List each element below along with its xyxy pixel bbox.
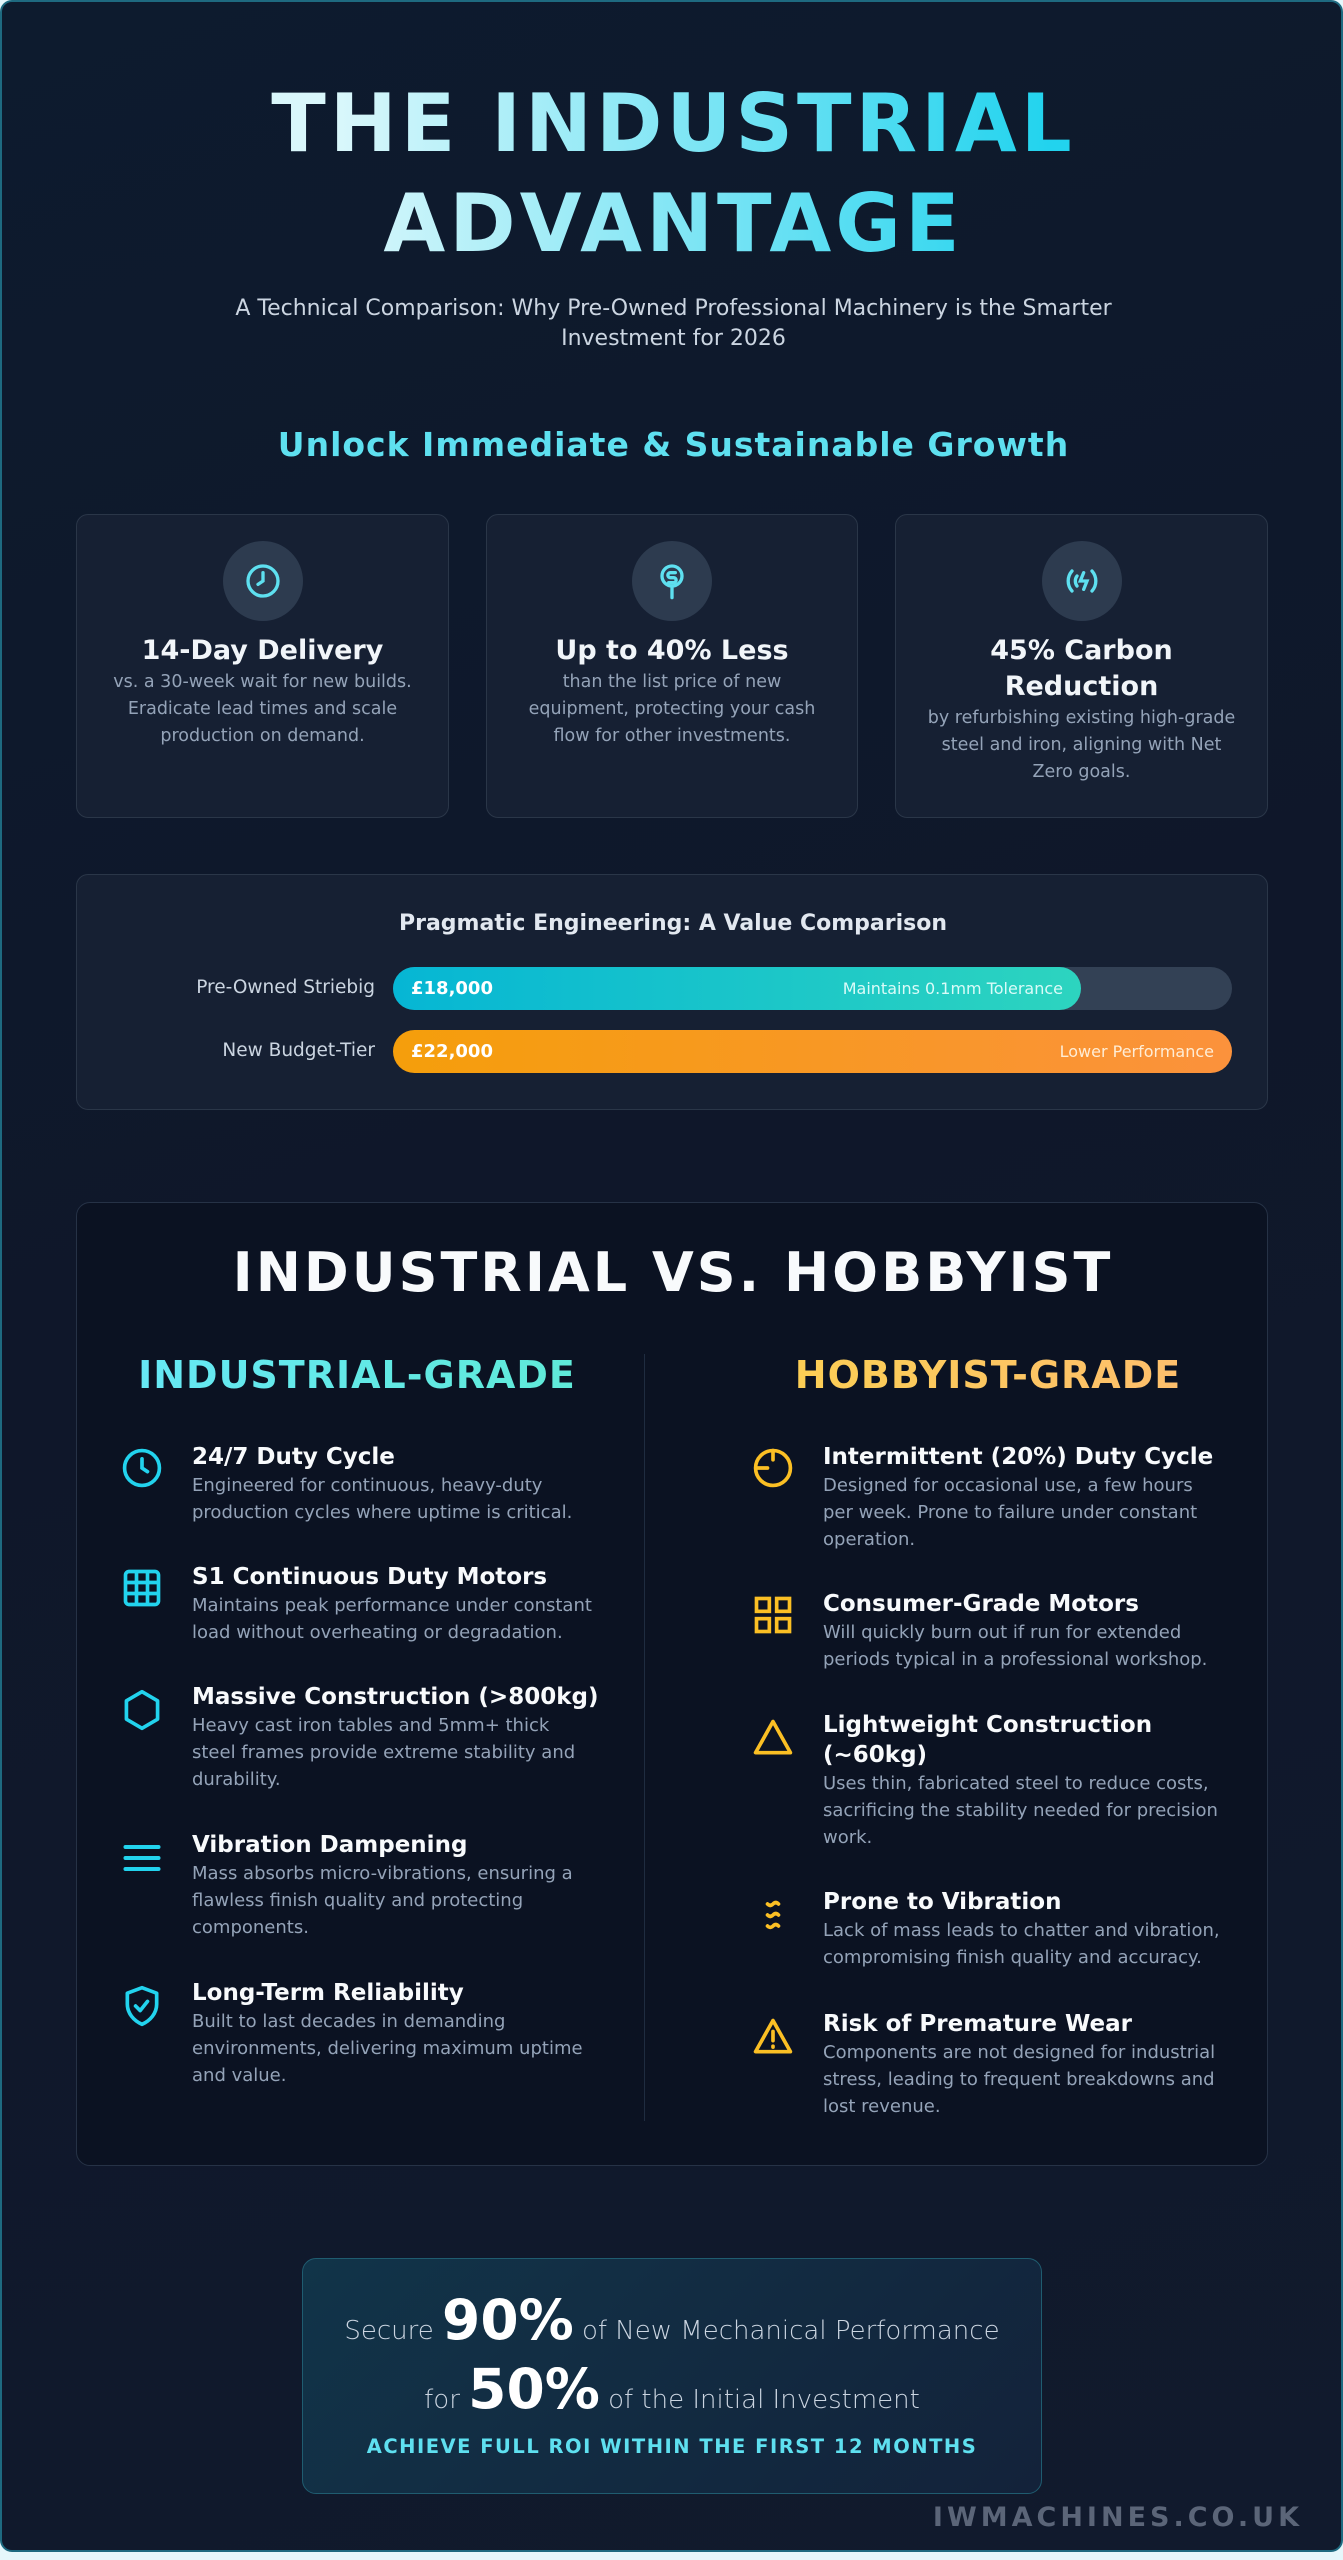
card: delivery: 14-Day Delivery — [142, 635, 383, 666]
item: reliability: Long-Term Reliability — [192, 1980, 464, 2006]
bar chart: £18,000 — [411, 978, 493, 999]
callout: ROI: for 50% of the Initial Investment — [424, 2357, 920, 2421]
list: industrial — [122, 1444, 598, 2086]
item: intermittent: Intermittent (20%) Duty Cycle — [823, 1444, 1213, 1470]
title — [2, 74, 1343, 274]
item: motors: Maintains peak performance under constant load without overheating or degradation. — [192, 1595, 592, 1643]
item: reliability: Built to last decades in demanding environments, delivering maximum uptime and value. — [192, 2011, 583, 2086]
column heading: industrial: INDUSTRIAL-GRADE — [138, 1353, 576, 1397]
footer: brand: IWMACHINES.CO.UK — [933, 2502, 1303, 2533]
title: THE INDUSTRIAL — [271, 77, 1076, 170]
chart title: Pragmatic Engineering: A Value Comparison — [399, 911, 947, 936]
column heading: hobbyist — [677, 1353, 1299, 1397]
item: prone to vibration: Prone to Vibration — [823, 1889, 1061, 1915]
item: prone to vibration: Lack of mass leads to chatter and vibration, compromising finish quality and accuracy. — [823, 1920, 1220, 1968]
card: carbon: 45% Carbon — [990, 635, 1173, 666]
item: consumer motors: Will quickly burn out if run for extended periods typical in a professional workshop. — [823, 1622, 1207, 1670]
icon: money — [632, 541, 712, 621]
item: motors — [124, 1564, 592, 1643]
bar chart: Maintains 0.1mm Tolerance — [843, 979, 1063, 998]
item: vibration dampening: Vibration Dampening — [192, 1832, 467, 1858]
item: intermittent: Designed for occasional use, a few hours per week. Prone to failure under constant operation. — [823, 1475, 1197, 1550]
card: price — [486, 514, 858, 818]
card: carbon: Reduction — [1005, 671, 1158, 702]
card: price: Up to 40% Less — [555, 635, 789, 666]
icon: signal — [1042, 541, 1122, 621]
card: carbon — [895, 514, 1268, 818]
item: duty cycle: 24/7 Duty Cycle — [192, 1444, 395, 1470]
item: motors: S1 Continuous Duty Motors — [192, 1564, 547, 1590]
card: delivery — [76, 514, 449, 818]
item: prone to vibration — [766, 1889, 1220, 1968]
item: lightweight: Uses thin, fabricated steel to reduce costs, sacrificing the stability needed for precision work. — [823, 1773, 1218, 1848]
item: vibration dampening — [124, 1832, 573, 1938]
heading: INDUSTRIAL VS. HOBBYIST — [233, 1241, 1113, 1304]
item: lightweight: Lightweight Construction (~60kg) — [823, 1712, 1152, 1768]
bar chart: £22,000 — [411, 1041, 493, 1062]
item: consumer motors: Consumer-Grade Motors — [823, 1591, 1139, 1617]
item: lightweight — [754, 1712, 1218, 1848]
item: vibration dampening: Mass absorbs micro-vibrations, ensuring a flawless finish quality and protecting components. — [192, 1863, 573, 1938]
column heading: hobbyist: HOBBYIST-GRADE — [795, 1353, 1181, 1397]
item: premature wear: Components are not designed for industrial stress, leading to frequent breakdowns and lost revenue. — [823, 2042, 1215, 2117]
item: construction — [124, 1684, 598, 1790]
bar chart: Lower Performance — [1060, 1042, 1214, 1061]
bar chart: New Budget-Tier — [222, 1040, 375, 1061]
card: carbon: by refurbishing existing high-grade steel and iron, aligning with Net Zero goals. — [928, 708, 1235, 782]
subtitle: A Technical Comparison: Why Pre-Owned Professional Machinery is the Smarter Investment for 2026 — [235, 296, 1112, 351]
item: reliability — [126, 1980, 583, 2086]
item: consumer motors — [754, 1591, 1207, 1670]
list: hobbyist — [754, 1444, 1220, 2117]
callout: ROI: Secure 90% of New Mechanical Performance — [344, 2288, 1000, 2352]
item: construction: Massive Construction (>800kg) — [192, 1684, 598, 1710]
icon: clock — [222, 541, 302, 621]
item: construction: Heavy cast iron tables and 5mm+ thick steel frames provide extreme stability and durability. — [192, 1715, 575, 1790]
section heading: growth: Unlock Immediate & Sustainable Growth — [278, 425, 1069, 464]
card: delivery: vs. a 30-week wait for new builds. Eradicate lead times and scale production on demand. — [113, 672, 412, 746]
title: ADVANTAGE — [383, 177, 964, 270]
panel: industrial vs hobbyist — [76, 1202, 1268, 2166]
item: intermittent — [754, 1444, 1213, 1550]
card: price: than the list price of new equipment, protecting your cash flow for other investments. — [529, 672, 815, 746]
callout: ROI: ACHIEVE FULL ROI WITHIN THE FIRST 12 MONTHS — [367, 2435, 977, 2458]
item: duty cycle: Engineered for continuous, heavy-duty production cycles where uptime is critical. — [192, 1475, 572, 1523]
item: premature wear — [754, 2011, 1215, 2117]
callout: ROI — [302, 2258, 1042, 2494]
bar chart: Pre-Owned Striebig — [196, 977, 375, 998]
item: duty cycle — [122, 1444, 572, 1523]
panel: value comparison — [76, 874, 1268, 1110]
item: premature wear: Risk of Premature Wear — [823, 2011, 1132, 2037]
bar chart — [196, 967, 1232, 1073]
